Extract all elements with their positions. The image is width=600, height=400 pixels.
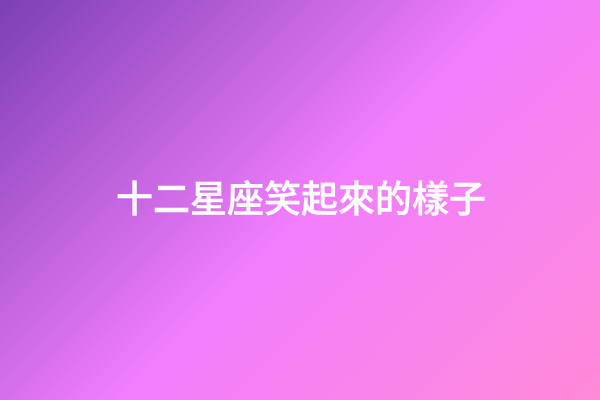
title: 十二星座笑起來的樣子 xyxy=(116,179,486,220)
